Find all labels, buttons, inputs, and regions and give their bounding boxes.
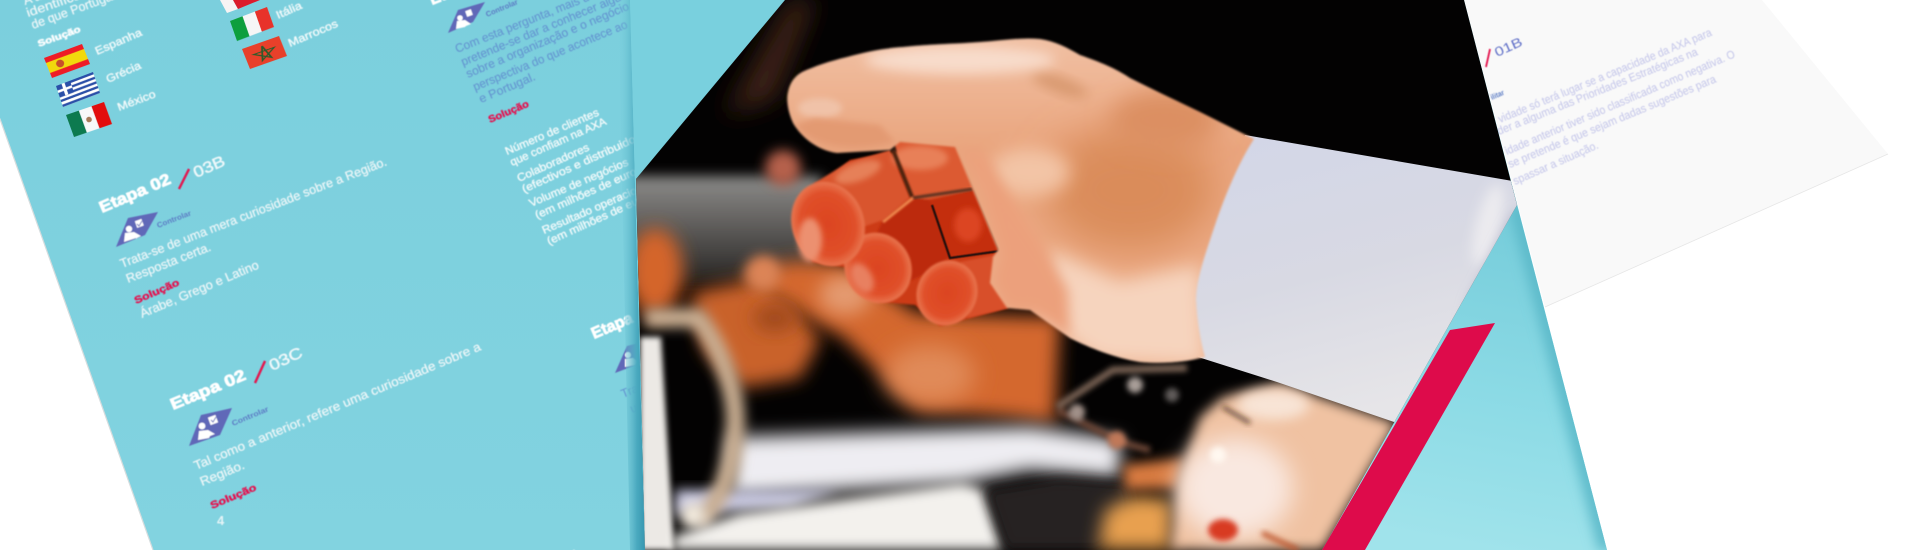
fingertip ellipses [790, 181, 978, 326]
solution label: Solução [133, 278, 181, 307]
teal lower-right triangle [1322, 205, 1607, 550]
country labels: Marrocos [286, 18, 340, 50]
question text: Resposta certa. [124, 240, 213, 286]
finger underlay [800, 142, 1008, 326]
flag: Qatar fragment [220, 0, 260, 13]
blurred orange at left [627, 228, 683, 316]
heading 03C: 03C [267, 344, 305, 375]
sheet paragraph [1496, 27, 1737, 188]
thumb nail [798, 98, 842, 118]
page surface [0, 0, 650, 550]
key figures list: (em milhões de euros) [545, 187, 659, 248]
question text: Tal como a anterior, refere uma curiosidade sobre a [192, 340, 483, 473]
flag: Mexico [66, 102, 112, 137]
upper ridge highlight [865, 46, 1055, 74]
back of hand darker shading [1045, 128, 1215, 252]
white sleeve bottom [672, 483, 1003, 550]
red slash and code 01B [1486, 34, 1525, 67]
cover teal surface [630, 0, 1607, 550]
question fragment: Tra [619, 381, 641, 401]
heading 03B: 03B [191, 153, 228, 182]
block: top right question [427, 0, 659, 248]
sheet surface [1464, 0, 1888, 307]
finger bodies [813, 140, 1008, 318]
icon: controlar badge [448, 2, 485, 33]
flag: Morocco [242, 36, 287, 69]
block: lower right cut-off step [570, 310, 657, 550]
page edge thickness [0, 119, 153, 550]
country labels: Espanha [93, 26, 145, 58]
question text: Trata-se de uma mera curiosidade sobre a Região. [118, 155, 389, 271]
key figures list: (efectivos e distribuidores) [520, 125, 657, 196]
spine shadow [618, 0, 645, 550]
finger crease lines [883, 150, 1000, 258]
photo black backdrop [630, 0, 1530, 550]
heading 03C [168, 344, 305, 414]
palm highlight [990, 148, 1070, 196]
sheet paragraph: spassar a situação. [1511, 140, 1600, 188]
country labels: Grécia [104, 59, 144, 86]
panel: front cover [622, 0, 1607, 550]
red slash and code 01B: 01B [1492, 34, 1525, 60]
sheet bottom edge [1545, 154, 1888, 307]
heading 03C: Etapa 02 [168, 367, 248, 414]
bright paper band [730, 427, 1120, 497]
sheet paragraph: se pretende é que sejam dadas sugestões para [1507, 73, 1718, 171]
blurred background hand [690, 255, 1060, 423]
heading fragment: Etapa [589, 310, 636, 343]
dark sleeve shadow [985, 478, 1133, 550]
key figures list: (em milhões de euros) [533, 162, 648, 222]
solution label: Solução [487, 99, 531, 126]
question text: perspectiva do que acontece ao [471, 17, 630, 94]
question text: e Portugal. [477, 69, 537, 106]
blurred glasses [1057, 368, 1187, 450]
block: Etapa 02 / 03B [97, 153, 389, 321]
key figures list: Número de clientes [503, 107, 601, 158]
label: Controlar: Controlar [155, 209, 192, 230]
label: Controlar: Controlar [230, 405, 270, 428]
icon: controlar badge [189, 408, 232, 446]
country labels: México [116, 88, 157, 114]
mug handle [645, 318, 735, 525]
hand base [780, 30, 1270, 370]
thumb underside tone [795, 118, 895, 148]
heading 03B [97, 153, 228, 217]
mug bottom glow [680, 502, 706, 528]
blurred brown upper left [725, 0, 815, 115]
lower-right blurred hand [1170, 383, 1397, 550]
finger highlights [892, 146, 948, 170]
sheet paragraph: vidade só terá lugar se a capacidade da AXA para [1497, 27, 1714, 126]
solution value: 4 [217, 513, 225, 528]
photo: hand in meeting [622, 0, 1535, 550]
key figures list: Colaboradores [515, 141, 592, 185]
key figures list [503, 107, 659, 248]
block: Etapa 02 / 03C [168, 340, 483, 528]
shirt cuff [1194, 135, 1517, 422]
question fragment: l [636, 416, 644, 430]
country labels: Itália [274, 0, 305, 22]
question text: Região. [198, 458, 247, 489]
flag: Greece [56, 72, 100, 107]
white vertical mug body [640, 337, 674, 550]
flag: Italy [230, 7, 274, 41]
key figures list: que confiam na AXA [508, 116, 609, 169]
question text: sobre a organização e o negócio [464, 0, 631, 81]
orange table patch [1098, 495, 1173, 550]
key figures list: Volume de negócios [527, 156, 631, 210]
icon: controlar badge [615, 338, 657, 373]
panel: left teal page [0, 0, 659, 550]
sheet paragraph: idade anterior tiver sido classificada como negativa. O [1503, 49, 1737, 158]
sheet paragraph: der a alguma das Prioridades Estratégicas na [1496, 46, 1700, 138]
country labels [93, 0, 340, 114]
blurred grey laptop [622, 176, 822, 284]
fingers [779, 140, 1008, 336]
teal right edge shading [1517, 205, 1607, 550]
heading 03B: Etapa 02 [97, 171, 174, 217]
controlar fragment: ilitar [1489, 88, 1506, 102]
fingertip highlights [798, 218, 879, 297]
solution label: countries: Solução [36, 24, 83, 50]
question fragment [619, 381, 646, 430]
mug inner shading [668, 341, 680, 349]
solution label: Solução [209, 483, 258, 512]
thumb crease [842, 63, 844, 93]
solution text: Árabe, Grego e Latino [137, 257, 261, 321]
main hand [780, 30, 1270, 370]
palm pad beside fingers [981, 164, 1076, 336]
blurred peach spot [765, 150, 801, 186]
icon: controlar badge [116, 212, 158, 247]
crease shadow [1031, 70, 1088, 100]
light lower palm [1040, 250, 1205, 365]
pink diagonal band [1322, 323, 1495, 550]
question fragment: un [628, 398, 646, 416]
panel: white background sheet (right) [1464, 0, 1888, 307]
key figures list: Resultado operacional [540, 179, 653, 237]
sheet text block [1486, 27, 1737, 188]
flag: Spain [44, 44, 90, 78]
orange reflection [1123, 458, 1185, 490]
lavender shadow under band [675, 490, 840, 515]
